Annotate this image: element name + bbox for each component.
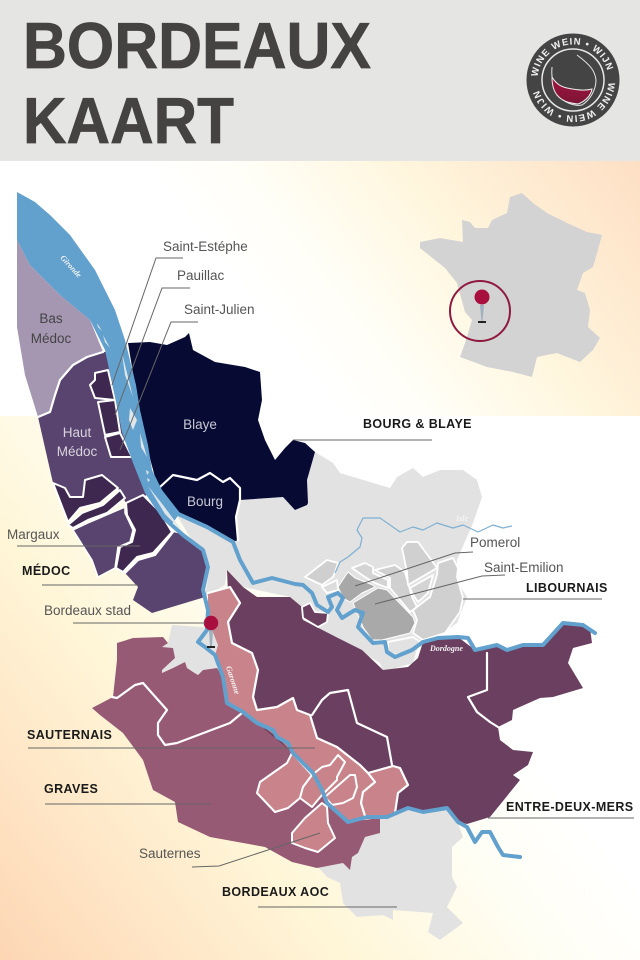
labels: appellations and regions: Saint-Julien (184, 302, 255, 317)
region: Entre-deux-Mers (227, 570, 592, 824)
labels: appellations and regions: Médoc (31, 331, 72, 346)
region: Bordeaux city (light gray) (162, 625, 218, 675)
labels: appellations and regions: Blaye (183, 417, 217, 432)
river: Isle (335, 518, 512, 573)
mini map of France with location marker (420, 193, 602, 377)
labels: appellations and regions: Saint-Emilion (484, 560, 564, 575)
region: Blaye (128, 333, 315, 510)
labels: appellations and regions: Pomerol (470, 535, 520, 550)
title: BORDEAUX (23, 10, 371, 82)
labels: appellations and regions: Bourg (187, 494, 223, 509)
appellation: Pauillac (98, 400, 120, 435)
river islands (97, 323, 183, 532)
region: Bordeaux generic, north (light gray) (176, 452, 482, 672)
river names (59, 253, 468, 696)
region: Bourg (160, 473, 240, 542)
background: upper gradient (0, 160, 640, 416)
river: Garonne (166, 520, 520, 857)
labels: appellations and regions (7, 239, 634, 899)
river: Gironde estuary (17, 192, 180, 524)
labels: appellations and regions: MÉDOC (22, 563, 71, 578)
labels: appellations and regions: Bordeaux stad (44, 603, 131, 618)
river: Dordogne (176, 513, 595, 657)
appellation: Sauternes (292, 803, 335, 852)
city marker: Bordeaux (204, 616, 218, 648)
region: Libournais appellations (305, 542, 463, 655)
appellation: Margaux (73, 507, 133, 577)
region: Bas Médoc (17, 240, 103, 417)
labels: appellations and regions: LIBOURNAIS (526, 581, 608, 595)
region: Haut Médoc (38, 352, 147, 503)
labels: appellations and regions: Médoc (57, 444, 98, 459)
appellation: Saint-Estèphe (90, 370, 115, 400)
title (23, 10, 371, 157)
appellation: Pomerol (338, 572, 375, 602)
leader lines (17, 258, 634, 907)
title: KAART (23, 85, 234, 157)
river names: Dordogne (429, 644, 463, 653)
labels: appellations and regions: BOURG & BLAYE (363, 417, 472, 431)
labels: appellations and regions: ENTRE-DEUX-MERS (506, 800, 634, 814)
background: lower gradient (0, 416, 640, 960)
river names: Garonne (224, 665, 242, 696)
region: Graves (92, 637, 380, 870)
region: Médoc (38, 352, 208, 613)
river names: Isle (455, 514, 468, 523)
labels: appellations and regions: Pauillac (177, 268, 225, 283)
appellation: Saint-Emilion (353, 588, 415, 640)
region: Bordeaux AOC, south (light gray) (318, 808, 463, 940)
labels: appellations and regions: Bas (39, 311, 63, 326)
header band (0, 0, 640, 161)
labels: appellations and regions: Margaux (7, 527, 60, 542)
labels: appellations and regions: SAUTERNAIS (27, 728, 112, 742)
river names: Gironde (59, 253, 84, 280)
map of Bordeaux wine regions (17, 192, 595, 940)
region: Sauternais and Premières Côtes (pink) (208, 587, 408, 852)
appellation: Saint-Julien (105, 433, 132, 457)
logo: wine wein wijn badge: WINE WEIN • WIJN WINE WEIN • WIJN (531, 38, 616, 122)
labels: appellations and regions: Haut (63, 425, 91, 440)
labels: appellations and regions: Sauternes (139, 846, 201, 861)
labels: appellations and regions: Saint-Estéphe (163, 239, 248, 254)
labels: appellations and regions: BORDEAUX AOC (222, 885, 329, 899)
labels: appellations and regions: GRAVES (44, 782, 98, 796)
